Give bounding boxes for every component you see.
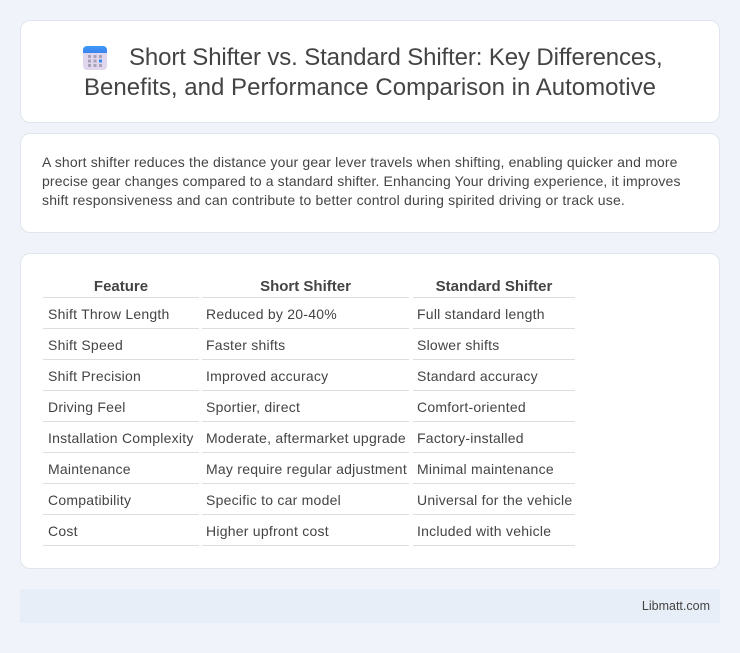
comparison table: Comfort-oriented xyxy=(417,399,526,415)
panel: intro card xyxy=(20,133,720,233)
comparison table: Moderate, aftermarket upgrade xyxy=(206,430,406,446)
comparison table: Faster shifts xyxy=(206,337,285,353)
comparison table: Minimal maintenance xyxy=(417,461,554,477)
comparison table: Shift Speed xyxy=(48,337,123,353)
comparison table: Slower shifts xyxy=(417,337,499,353)
intro text: precise gear changes compared to a standard shifter. Enhancing Your driving experience, it improves xyxy=(42,173,681,189)
comparison table: Universal for the vehicle xyxy=(417,492,572,508)
comparison table: Shift Precision xyxy=(48,368,141,384)
comparison table: Improved accuracy xyxy=(206,368,328,384)
comparison table: Reduced by 20-40% xyxy=(206,306,337,322)
comparison table: Full standard length xyxy=(417,306,545,322)
column headers: Standard Shifter xyxy=(436,278,552,295)
comparison table: Specific to car model xyxy=(206,492,341,508)
comparison table: Cost xyxy=(48,523,78,539)
comparison table: May require regular adjustment xyxy=(206,461,407,477)
comparison table: Maintenance xyxy=(48,461,131,477)
title xyxy=(84,44,663,101)
column headers: Short Shifter xyxy=(260,278,351,295)
icon: calendar xyxy=(83,46,107,70)
intro text xyxy=(42,154,681,208)
comparison table xyxy=(43,278,575,546)
comparison table: Included with vehicle xyxy=(417,523,551,539)
comparison table: Standard accuracy xyxy=(417,368,538,384)
panel: title card xyxy=(20,20,720,123)
comparison table: Shift Throw Length xyxy=(48,306,170,322)
comparison table: Sportier, direct xyxy=(206,399,300,415)
comparison table: Factory-installed xyxy=(417,430,524,446)
column headers: Feature xyxy=(94,278,148,295)
footer bar xyxy=(20,589,720,623)
intro text: A short shifter reduces the distance your gear lever travels when shifting, enabling quicker and more xyxy=(42,154,678,170)
title: Short Shifter vs. Standard Shifter: Key Differences, xyxy=(129,44,663,71)
footer text: Libmatt.com xyxy=(642,599,710,613)
comparison table: Driving Feel xyxy=(48,399,126,415)
comparison table: Higher upfront cost xyxy=(206,523,329,539)
comparison table: Compatibility xyxy=(48,492,131,508)
panel: comparison table card xyxy=(20,253,720,569)
title: Benefits, and Performance Comparison in Automotive xyxy=(84,74,656,101)
comparison table: Installation Complexity xyxy=(48,430,194,446)
column headers xyxy=(94,278,552,295)
intro text: shift responsiveness and can contribute to better control during spirited driving or track use. xyxy=(42,192,625,208)
